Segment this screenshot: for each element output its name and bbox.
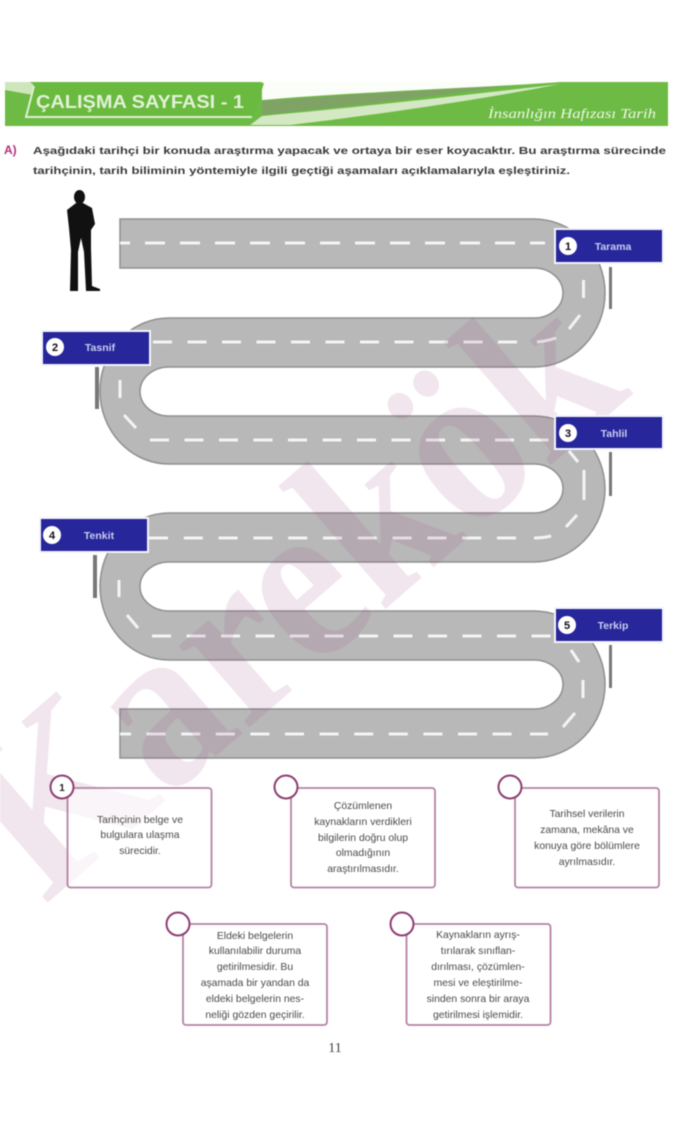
card 2: kaynakların verdikleri — [314, 817, 412, 828]
card 2: araştırılmasıdır. — [327, 864, 399, 875]
sign 2: Tasnif: 2 — [52, 342, 58, 354]
card 1: Tarihçinin belge ve — [97, 815, 183, 826]
sign 4: Tenkit: Tenkit — [84, 530, 115, 542]
winding road — [100, 219, 605, 758]
sign 1: Tarama: Tarama — [595, 241, 631, 253]
card 3: ayrılmasıdır. — [559, 857, 615, 868]
subtitle: İnsanlığın Hafızası Tarih — [487, 106, 656, 122]
title tab — [24, 83, 264, 118]
sign 2: Tasnif: Tasnif — [85, 342, 116, 354]
card 5: Kaynakların ayrış- — [436, 930, 520, 941]
sign 1: Tarama — [555, 229, 663, 263]
card 2 — [274, 776, 435, 888]
sign 5: Terkip: Terkip — [598, 620, 628, 632]
page number: 11 — [328, 1041, 342, 1056]
card 2: Çözümlenen — [334, 801, 392, 812]
card 5: mesi ve eleştirilme- — [434, 978, 522, 989]
icon: standing man silhouette — [67, 190, 100, 291]
card 4: Eldeki belgelerin — [217, 931, 293, 942]
card 5: tırılarak sınıflan- — [441, 946, 515, 957]
card 1 — [50, 776, 212, 888]
card 1: sürecidir. — [119, 846, 161, 857]
card 5: dırılması, çözümlen- — [431, 962, 525, 973]
sign 3: Tahlil: Tahlil — [601, 428, 627, 440]
instructions text — [4, 143, 666, 177]
card 2: olmadığının — [336, 848, 390, 859]
sign 5: Terkip: 5 — [564, 620, 570, 632]
card 4: getirilmesidir. Bu — [217, 962, 293, 973]
sign 3: Tahlil — [555, 416, 663, 449]
sign 5: Terkip — [555, 608, 663, 642]
sign 3: Tahlil: 3 — [565, 428, 571, 440]
card 4: eldeki belgelerin nes- — [206, 994, 304, 1005]
card 1: 1 — [59, 783, 65, 794]
card 5: sinden sonra bir araya — [427, 994, 530, 1005]
card 3: Tarihsel verilerin — [549, 809, 625, 820]
card 4: kullanılabilir duruma — [209, 946, 301, 957]
instructions text: tarihçinin, tarih biliminin yöntemiyle ilgili geçtiği aşamaları açıklamalarıyla eşleştiriniz. — [33, 166, 570, 177]
card 3: zamana, mekâna ve — [540, 825, 634, 836]
instructions text: A) — [4, 143, 17, 157]
card 1: bulgulara ulaşma — [100, 830, 180, 841]
card 4: neliği gözden geçirilir. — [205, 1010, 305, 1021]
instructions text: Aşağıdaki tarihçi bir konuda araştırma yapacak ve ortaya bir eser koyacaktır. Bu araştırma sürecinde — [33, 146, 666, 157]
title tab: ÇALIŞMA SAYFASI - 1 — [36, 91, 244, 112]
card 2: bilgilerin doğru olup — [318, 833, 408, 844]
card 5: getirilmesi işlemidir. — [433, 1010, 523, 1021]
sign 4: Tenkit — [40, 518, 148, 552]
sign 1: Tarama: 1 — [565, 241, 571, 253]
header band — [5, 82, 668, 126]
sign posts — [93, 267, 612, 688]
card 5 — [390, 912, 550, 1025]
card 4: aşamada bir yandan da — [201, 978, 310, 989]
card 4 — [166, 912, 327, 1025]
sign 2: Tasnif — [42, 331, 150, 365]
card 3 — [498, 776, 659, 888]
sign 4: Tenkit: 4 — [49, 530, 56, 542]
card 3: konuya göre bölümlere — [534, 841, 640, 852]
